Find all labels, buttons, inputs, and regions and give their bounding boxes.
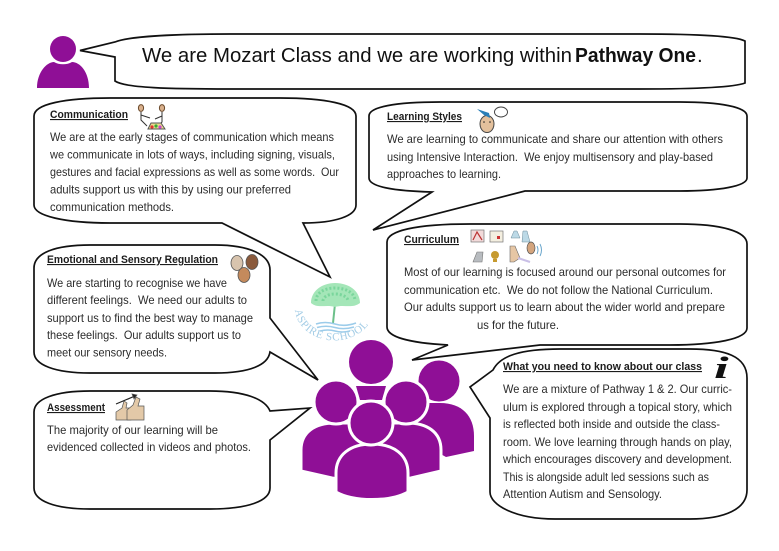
logo: Aspire School xyxy=(294,283,368,340)
text: learning styles: We are learning to communicate and share our attention with others xyxy=(387,133,723,146)
text: assessment xyxy=(47,424,251,454)
text: class information: room. We love learning through hands on play, xyxy=(503,436,732,449)
title: Pathway One xyxy=(575,44,696,67)
text: communication: we communicate in lots of ways, including signing, visuals, xyxy=(49,149,335,162)
text: curriculum: communication etc. We do not follow the National Curriculum. xyxy=(404,284,713,297)
icon: group of people xyxy=(301,340,474,500)
text: learning styles xyxy=(387,133,723,181)
text: communication: We are at the early stages of communication which means xyxy=(50,131,334,144)
text: emotional and sensory regulation: support us to find the best way to manage xyxy=(47,312,253,325)
text: emotional and sensory regulation: We are starting to recognise we have xyxy=(47,277,227,290)
heading: communication: Communication xyxy=(50,109,128,121)
text: class information: Attention Autism and Sensology. xyxy=(503,488,662,501)
panel: learning styles xyxy=(369,102,747,230)
text: emotional and sensory regulation: these feelings. Our adults support us to xyxy=(47,329,241,342)
panel: emotional and sensory regulation xyxy=(34,245,318,380)
title: We are Mozart Class and we are working within xyxy=(142,44,572,67)
text: emotional and sensory regulation: different feelings. We need our adults to xyxy=(47,294,247,307)
title: . xyxy=(697,44,703,67)
text: emotional and sensory regulation: meet our sensory needs. xyxy=(47,346,167,360)
icon: thinking head xyxy=(477,107,508,132)
text: curriculum: Most of our learning is focused around our personal outcomes for xyxy=(404,266,726,279)
tree xyxy=(311,283,360,323)
heading: curriculum: Curriculum xyxy=(404,234,459,246)
text: assessment: The majority of our learning will be xyxy=(47,424,218,437)
heading: emotional and sensory regulation: Emotional and Sensory Regulation xyxy=(47,254,218,266)
text: learning styles: approaches to learning. xyxy=(387,168,501,181)
text: learning styles: using Intensive Interaction. We enjoy multisensory and play-based xyxy=(387,151,713,164)
text: class information xyxy=(502,383,732,501)
text: class information: ulum is explored through a topical story, which xyxy=(503,401,732,414)
text: class information: This is alongside adult led sessions such as xyxy=(503,471,709,484)
text: class information: is reflected both inside and outside the class- xyxy=(503,418,720,431)
heading: what you need to know about our class: What you need to know about our class xyxy=(503,361,702,373)
panel: communication xyxy=(34,98,356,277)
text: emotional and sensory regulation xyxy=(47,277,253,360)
heading: learning styles: Learning Styles xyxy=(387,111,462,123)
icons: curriculum symbols xyxy=(471,230,542,262)
text: communication xyxy=(49,131,339,214)
icon: three faces xyxy=(231,254,258,282)
text: curriculum: Our adults support us to learn about the wider world and prepare xyxy=(404,301,725,314)
text: communication: gestures and facial expressions as well as some words. Our xyxy=(50,166,339,179)
text: curriculum xyxy=(404,266,726,332)
panel: what you need to know about our class xyxy=(470,349,747,519)
text: assessment: evidenced collected in videos and photos. xyxy=(47,441,251,454)
school name: ASPIRE SCHOOL xyxy=(294,310,368,340)
icon: communication xyxy=(138,105,165,129)
panel: assessment xyxy=(34,391,310,509)
text: class information: We are a mixture of Pathway 1 & 2. Our curric- xyxy=(503,383,732,396)
text: curriculum: us for the future. xyxy=(477,319,559,332)
text: communication: communication methods. xyxy=(50,201,174,214)
icon: thumbs up with arrow xyxy=(116,394,144,420)
heading: assessment: Assessment xyxy=(47,402,105,414)
panel: curriculum xyxy=(387,224,747,360)
text: communication: adults support us with this by using our preferred xyxy=(50,184,291,196)
icon: single person xyxy=(37,36,89,88)
water waves xyxy=(316,322,356,332)
title speech bubble xyxy=(80,34,745,89)
text: class information: which encourages discovery and development. xyxy=(502,453,732,466)
icon: information i: i xyxy=(714,351,729,385)
